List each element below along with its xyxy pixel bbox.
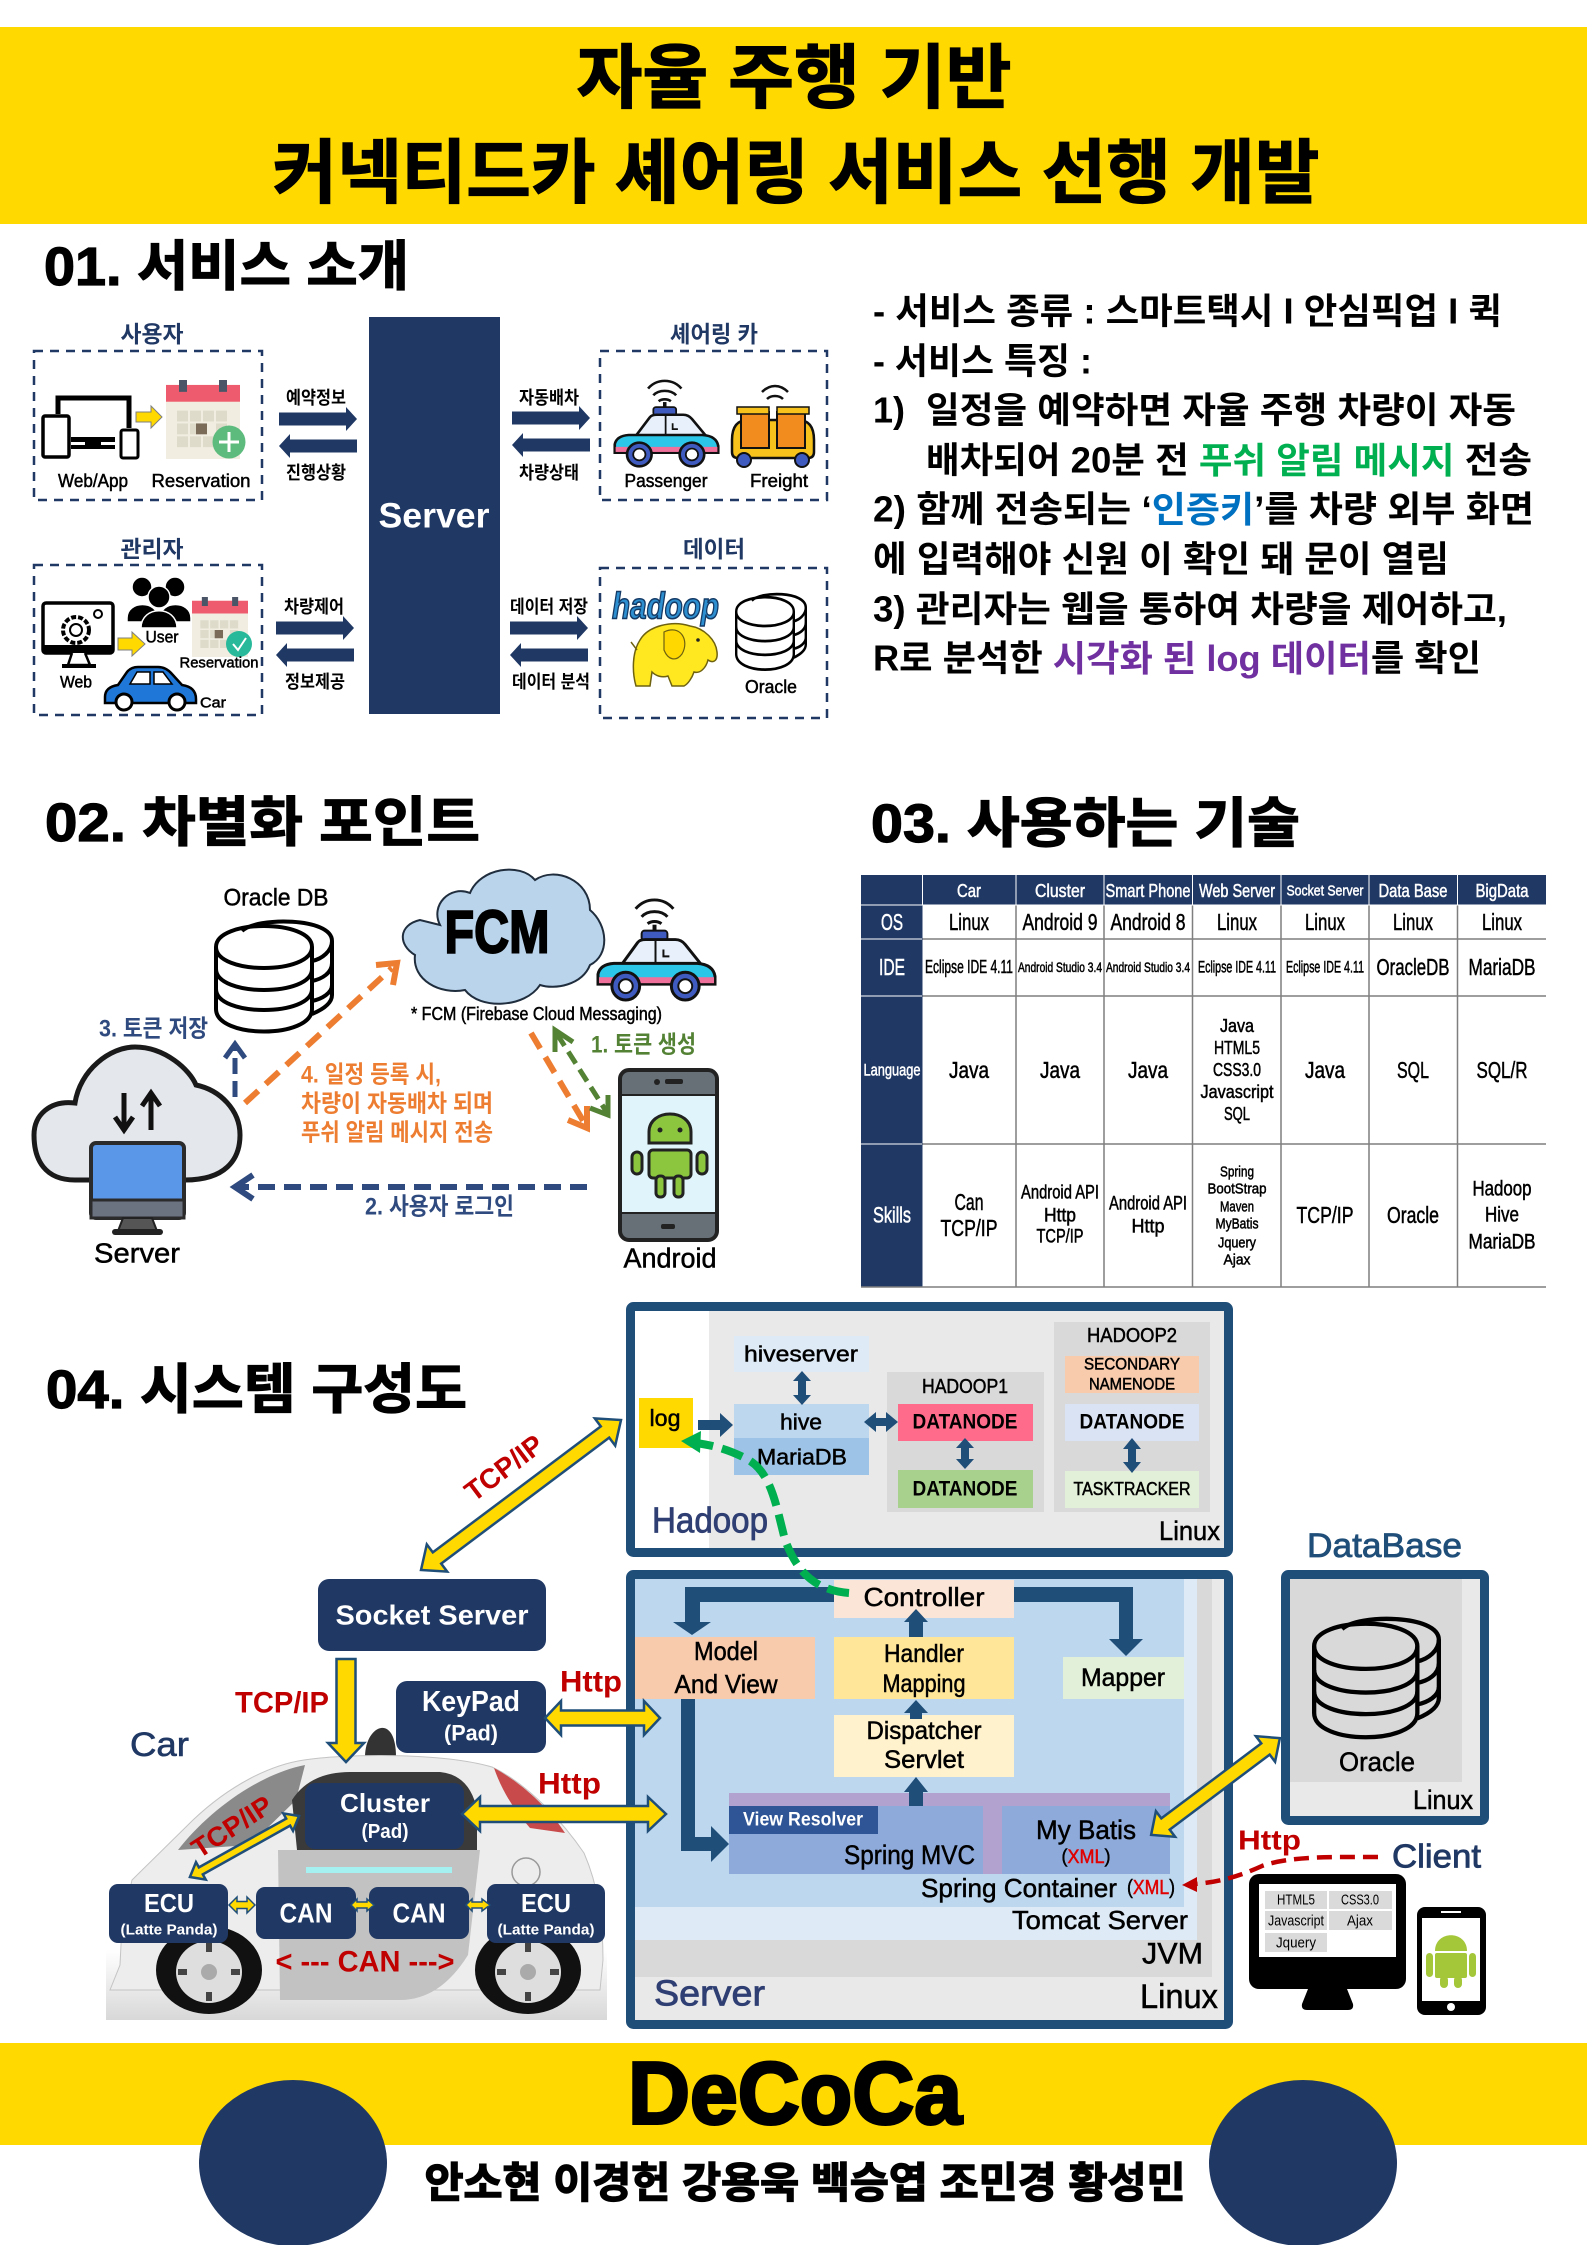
box: ECU right <box>487 1884 605 1943</box>
table row: skills: TCP/IP <box>1296 1202 1354 1228</box>
table row: skills: Android API <box>1109 1194 1187 1214</box>
arrow labels: 차량제어 <box>284 597 344 617</box>
table row: skills: Android API <box>1021 1182 1099 1204</box>
footer circle left <box>199 2080 387 2245</box>
panel: admin: Car <box>200 694 226 712</box>
box: spring and batis layer <box>729 1793 1170 1874</box>
label: push step: 푸쉬 알림 메시지 전송 <box>301 1120 493 1146</box>
box: HADOOP2: SECONDARY <box>1084 1354 1180 1374</box>
box: HADOOP1 <box>887 1372 1044 1512</box>
box: model and view: And View <box>674 1669 778 1699</box>
footer band <box>0 2043 1587 2145</box>
box: hiveserver <box>734 1336 869 1372</box>
FCM cloud <box>403 870 604 1004</box>
service description text: - 서비스 종류 : 스마트택시 I 안심픽업 I 퀵 <box>873 290 1502 332</box>
label: XML: (XML) <box>1127 1877 1175 1899</box>
arrow labels: 예약정보 <box>286 388 346 408</box>
box: mapper <box>1063 1657 1184 1699</box>
table row: language: Java <box>1305 1057 1345 1083</box>
service description text: 1) <box>873 390 905 430</box>
panel: user: 사용자 <box>120 321 184 347</box>
table row: skills: Ajax <box>1224 1252 1251 1268</box>
table row labels: OS <box>881 909 903 935</box>
arrow: socket server to cluster <box>328 1659 364 1762</box>
icon: client monitor <box>1249 1874 1406 2010</box>
box: model and view: Model <box>694 1636 758 1666</box>
table row: language: Java <box>1040 1057 1080 1083</box>
table row: skills: Oracle <box>1387 1202 1439 1228</box>
panel: data: hadoop <box>612 586 719 626</box>
title line 1: 자율 주행 기반 <box>576 39 1012 117</box>
box: HADOOP1: DATANODE <box>912 1410 1018 1434</box>
table row labels: Language <box>864 1060 920 1080</box>
android phone icon: Android <box>624 1242 716 1274</box>
box: spring and batis layer: My Batis <box>1036 1815 1136 1845</box>
box: log: log <box>650 1405 680 1431</box>
service description text: R로 분석한 시각화 된 log 데이터를 확인 <box>873 638 1481 678</box>
arrow: client to spring container <box>1182 1857 1378 1892</box>
box: HADOOP2 <box>1054 1322 1210 1512</box>
box: hive <box>734 1404 869 1438</box>
small arrows between CAN boxes <box>229 1897 490 1913</box>
box: log <box>639 1398 693 1448</box>
box: spring and batis layer: (XML) <box>1062 1846 1110 1868</box>
section heading 03: 03. 사용하는 기술 <box>871 794 1300 854</box>
table row: skills: TCP/IP <box>940 1215 998 1241</box>
label: Http cluster: Http <box>538 1768 601 1800</box>
service description text: 2) 함께 전송되는 ‘인증키’를 차량 외부 화면 <box>873 488 1534 530</box>
box: hive: hive <box>780 1410 822 1434</box>
Oracle DB icon <box>216 884 332 1032</box>
arrow: user login <box>235 1175 587 1199</box>
table header row: Cluster <box>1035 881 1085 901</box>
panel: database: Linux <box>1413 1785 1473 1815</box>
server cloud icon <box>34 1047 240 1268</box>
panel: service architecture diagram <box>34 317 827 718</box>
panel: car <box>106 1726 607 2020</box>
car illustration <box>106 1728 607 2020</box>
section heading 02: 02. 차별화 포인트 <box>45 793 480 853</box>
arrow: cluster to ECU <box>185 1807 304 1886</box>
arrow labels: 진행상황 <box>286 463 346 483</box>
table row: language: SQL <box>1397 1057 1429 1083</box>
table header row: Socket Server <box>1286 882 1364 900</box>
arrows: user and server <box>279 407 357 458</box>
box: keypad: (Pad) <box>444 1720 498 1746</box>
arrow: token save <box>225 1044 245 1097</box>
arrow labels: 정보제공 <box>285 672 345 692</box>
box: MariaDB: MariaDB <box>757 1444 847 1470</box>
arrow: cluster to server <box>462 1797 666 1831</box>
server column <box>369 317 500 714</box>
label: user login: 2. 사용자 로그인 <box>365 1194 514 1220</box>
label: Http keypad: Http <box>560 1666 622 1698</box>
arrow labels <box>284 388 590 692</box>
arrow labels: 데이터 분석 <box>512 672 590 692</box>
table header row: Smart Phone <box>1106 881 1190 901</box>
service description text: 에 입력해야 신원 이 확인 돼 문이 열림 <box>873 538 1449 580</box>
label: Server: Server <box>654 1972 765 2014</box>
box: spring and batis layer: View Resolver <box>743 1810 864 1830</box>
panel: user <box>34 321 262 500</box>
icon: client monitor: HTML5 <box>1277 1892 1315 1908</box>
panel: sharing car: 셰어링 카 <box>670 321 758 347</box>
icon: client phone <box>1417 1907 1486 2015</box>
panel: user: Web/App <box>58 471 128 491</box>
section heading 04: 04. 시스템 구성도 <box>46 1360 467 1420</box>
arrow: push to FCM <box>245 963 397 1103</box>
section heading 01: 01. 서비스 소개 <box>44 237 409 297</box>
table header row: Web Server <box>1199 881 1275 901</box>
service description text <box>873 290 1534 678</box>
arrow head: log <box>681 1431 701 1453</box>
box: mapper: Mapper <box>1081 1664 1165 1692</box>
arrow labels: 데이터 저장 <box>510 597 588 617</box>
box: cluster: (Pad) <box>362 1821 408 1843</box>
table row: skills: Can <box>954 1189 984 1215</box>
box: HADOOP1: DATANODE <box>912 1478 1018 1500</box>
table row labels: Skills <box>873 1202 911 1228</box>
table row: language: HTML5 <box>1214 1038 1260 1058</box>
label: Hadoop: Hadoop <box>652 1500 768 1540</box>
arrow: keypad to server <box>545 1701 660 1735</box>
panel: sharing car: Passenger <box>624 471 708 491</box>
table row: skills: BootStrap <box>1208 1180 1266 1198</box>
android phone icon <box>620 1070 717 1274</box>
service description text: 일정을 예약하면 자율 주행 차량이 자동 <box>926 390 1516 430</box>
box: socket server: Socket Server <box>336 1600 529 1630</box>
table row: language: Javascript <box>1200 1082 1274 1102</box>
table row: language: SQL/R <box>1476 1057 1528 1083</box>
arrows: data and server <box>510 616 588 667</box>
label: token create: 1. 토큰 생성 <box>591 1032 696 1058</box>
table row: skills: TCP/IP <box>1036 1226 1084 1248</box>
table row: OS: Linux <box>949 909 989 935</box>
table row: skills: Hadoop <box>1472 1178 1532 1200</box>
taxi icon <box>598 900 715 1000</box>
table row: skills: Http <box>1044 1206 1076 1226</box>
panel: data <box>600 536 827 718</box>
panel: database: DataBase <box>1307 1527 1462 1565</box>
arrow: controller log dashed <box>696 1443 849 1593</box>
box: hiveserver: hiveserver <box>744 1342 858 1366</box>
arrow: top TCP/IP <box>411 1406 631 1584</box>
box: dispatcher servlet <box>834 1715 1014 1777</box>
panel: sharing car <box>600 321 827 500</box>
box: HADOOP2: DATANODE <box>1080 1410 1184 1434</box>
table row: IDE: Android Studio 3.4 <box>1018 959 1102 975</box>
box: HADOOP2: NAMENODE <box>1089 1374 1175 1394</box>
box: CAN left <box>256 1887 356 1939</box>
arrows: admin and server <box>276 616 354 667</box>
table row: skills: Jquery <box>1218 1234 1256 1252</box>
panel: database: Oracle <box>1339 1747 1415 1777</box>
panel: admin: User <box>146 628 179 646</box>
icon: client monitor: Ajax <box>1347 1912 1373 1930</box>
label: JVM: JVM <box>1142 1938 1203 1970</box>
arrows inside Hadoop <box>698 1371 1141 1473</box>
FCM cloud: FCM <box>444 898 550 966</box>
label: Http client: Http <box>1238 1824 1301 1856</box>
box: ECU right: ECU <box>521 1888 571 1918</box>
service description text: - 서비스 특징 : <box>873 340 1092 382</box>
table row: IDE <box>925 954 1536 980</box>
box: controller <box>834 1580 1014 1618</box>
table row: skills: Spring <box>1220 1164 1254 1180</box>
label: tomcat: Tomcat Server <box>1012 1905 1188 1935</box>
table header row: BigData <box>1476 881 1529 901</box>
table row: OS: Linux <box>1305 909 1345 935</box>
arrow: controller to model <box>673 1587 834 1635</box>
arrow labels: 차량상태 <box>519 463 579 483</box>
box: MariaDB <box>734 1438 869 1475</box>
box: cluster: Cluster <box>340 1788 430 1818</box>
panel: admin: Web <box>60 672 92 692</box>
icon: client monitor: Jquery <box>1276 1934 1316 1952</box>
box: model and view <box>635 1636 815 1699</box>
server cloud icon: Server <box>94 1238 180 1268</box>
table row: skills: Maven <box>1220 1198 1254 1216</box>
box: HADOOP2: TASKTRACKER <box>1074 1479 1190 1499</box>
panel: admin: Reservation <box>180 654 258 672</box>
box: spring and batis layer: Spring MVC <box>844 1840 975 1870</box>
table row: IDE: OracleDB <box>1376 954 1450 980</box>
table row labels <box>864 909 920 1228</box>
arrow: token create <box>555 1030 608 1115</box>
table row: IDE: Eclipse IDE 4.11 <box>925 957 1013 977</box>
box: ECU left: ECU <box>144 1888 194 1918</box>
table row: language: Java <box>1220 1016 1255 1036</box>
box: handler mapping <box>834 1637 1014 1699</box>
team members: 안소현 이경헌 강용욱 백승엽 조민경 황성민 <box>424 2160 1186 2206</box>
table row: skills: MariaDB <box>1468 1230 1536 1254</box>
label: TCP/IP car: TCP/IP <box>186 1790 278 1864</box>
table row: OS: Android 8 <box>1110 909 1186 935</box>
panel: FCM flow diagram <box>34 870 717 1274</box>
panel: sharing car: Freight <box>750 471 808 491</box>
box: socket server <box>318 1579 546 1651</box>
FCM note: * FCM (Firebase Cloud Messaging) <box>411 1004 662 1024</box>
box: CAN right <box>369 1887 469 1939</box>
table row: language: CSS3.0 <box>1213 1060 1261 1080</box>
arrow: mybatis to oracle <box>1142 1725 1289 1848</box>
box: ECU left <box>109 1884 228 1943</box>
box: dispatcher servlet: Dispatcher <box>866 1717 982 1745</box>
panel: admin <box>34 536 262 715</box>
table row: IDE: MariaDB <box>1468 954 1536 980</box>
arrow labels: 자동배차 <box>519 388 579 408</box>
box: keypad: KeyPad <box>422 1686 520 1718</box>
box: keypad <box>396 1681 546 1753</box>
table row: IDE: Android Studio 3.4 <box>1106 959 1190 975</box>
icon: client monitor: Javascript <box>1268 1912 1325 1930</box>
header band <box>0 27 1587 224</box>
icon: client monitor: CSS3.0 <box>1341 1892 1379 1908</box>
label: Linux: Linux <box>1159 1516 1220 1546</box>
panel: user: Reservation <box>152 471 250 491</box>
box: dispatcher servlet: Servlet <box>884 1746 964 1774</box>
label: top TCP/IP: TCP/IP <box>459 1429 549 1507</box>
table header row: Car <box>957 881 981 901</box>
Oracle DB icon: Oracle DB <box>224 884 328 912</box>
table header row: Data Base <box>1378 881 1448 901</box>
table: technologies <box>861 875 1546 1287</box>
arrows: sharing car and server <box>512 406 590 457</box>
panel: database <box>1286 1527 1484 1820</box>
table row labels: IDE <box>879 954 905 980</box>
box: ECU right: (Latte Panda) <box>498 1922 594 1938</box>
panel: Hadoop <box>630 1306 1228 1552</box>
box: handler mapping: Mapping <box>882 1670 966 1698</box>
box: ECU left: (Latte Panda) <box>120 1922 218 1938</box>
table header row <box>957 881 1529 901</box>
table row: language: Java <box>949 1057 989 1083</box>
service description text: 3) 관리자는 웹을 통하여 차량을 제어하고, <box>873 588 1507 630</box>
table row: OS: Linux <box>1482 909 1522 935</box>
box: CAN left: CAN <box>280 1898 332 1928</box>
table row: OS: Android 9 <box>1022 909 1098 935</box>
label: push step: 차량이 자동배차 되며 <box>301 1090 493 1118</box>
panel: admin: 관리자 <box>120 536 184 562</box>
label: spring container: Spring Container <box>921 1873 1117 1903</box>
label: push step <box>301 1062 493 1146</box>
label: CAN bus: < --- CAN ---> <box>276 1946 454 1978</box>
box: handler mapping: Handler <box>884 1640 964 1668</box>
table row: IDE: Eclipse IDE 4.11 <box>1198 958 1276 976</box>
title line 2: 커넥티드카 셰어링 서비스 선행 개발 <box>272 134 1320 212</box>
box: cluster <box>305 1783 464 1849</box>
label: token save: 3. 토큰 저장 <box>99 1016 208 1042</box>
panel: data: Oracle <box>745 677 797 697</box>
box: CAN right: CAN <box>392 1898 446 1928</box>
arrow: model to spring MVC <box>681 1699 729 1862</box>
table row: skills: Http <box>1132 1216 1164 1238</box>
arrows: upward flow <box>904 1609 928 1806</box>
service description text: 배차되어 20분 전 푸쉬 알림 메시지 전송 <box>926 440 1532 480</box>
label: Linux: Linux <box>1140 1978 1218 2016</box>
table row: language: Java <box>1128 1057 1168 1083</box>
panel: server <box>630 1431 1228 2024</box>
box: HADOOP2: HADOOP2 <box>1087 1325 1177 1347</box>
box: HADOOP1: HADOOP1 <box>922 1376 1008 1398</box>
table row: skills: MyBatis <box>1216 1216 1258 1232</box>
label: Client: Client <box>1392 1838 1481 1874</box>
footer circle right <box>1209 2080 1397 2245</box>
arrow: FCM to phone <box>531 1033 587 1128</box>
team name: DeCoCa <box>628 2044 963 2142</box>
panel: data: 데이터 <box>683 536 745 562</box>
table row: OS <box>949 909 1522 935</box>
table row: language <box>949 1016 1528 1124</box>
box: controller: Controller <box>864 1582 985 1612</box>
table row: OS: Linux <box>1217 909 1257 935</box>
table row: IDE: Eclipse IDE 4.11 <box>1286 958 1364 976</box>
table row: language: SQL <box>1224 1104 1250 1124</box>
label: push step: 4. 일정 등록 시, <box>301 1062 441 1088</box>
arrow: controller to mapper <box>1014 1587 1143 1656</box>
server column: Server <box>378 496 490 536</box>
table row: skills: Hive <box>1485 1204 1519 1226</box>
label: TCP/IP socket: TCP/IP <box>235 1686 329 1720</box>
table row: OS: Linux <box>1393 909 1433 935</box>
label: car: Car <box>130 1726 189 1764</box>
table row: skills <box>940 1164 1536 1268</box>
